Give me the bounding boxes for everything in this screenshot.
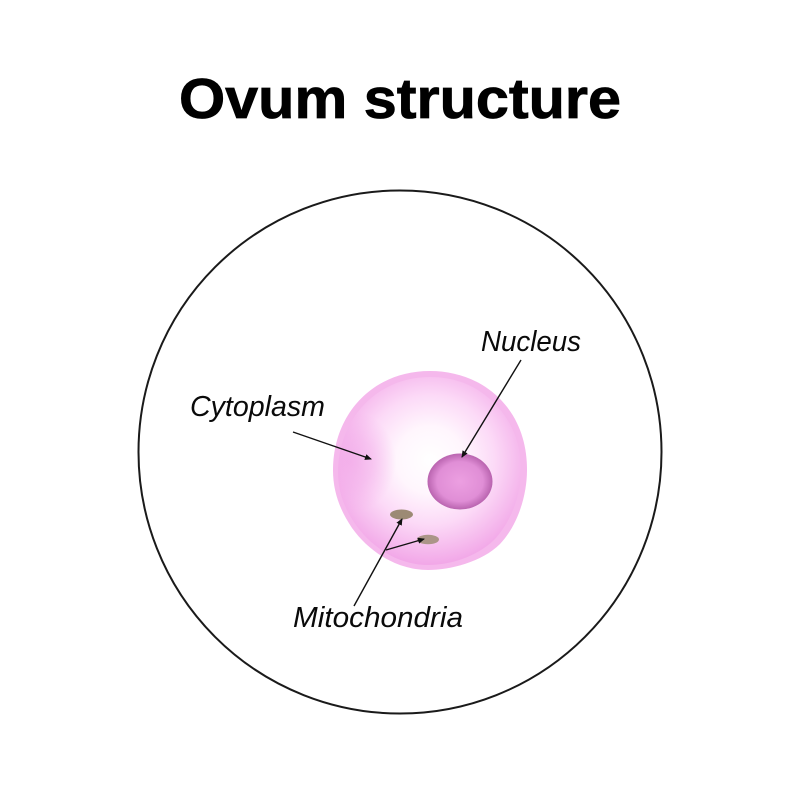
outer circle: zona boundary — [138, 190, 662, 714]
cytoplasm shading patch — [338, 426, 390, 498]
mitochondrion lower — [417, 535, 439, 544]
infographic — [138, 78, 662, 714]
label: Mitochondria: Mitochondria — [293, 602, 463, 634]
arrow: lower mitochondrion — [386, 539, 424, 550]
arrow: cytoplasm — [293, 432, 371, 459]
ovum cell — [333, 371, 527, 570]
arrow: upper mitochondrion — [354, 519, 402, 606]
mitochondrion upper — [390, 510, 413, 520]
nucleus — [428, 454, 492, 510]
arrow: nucleus — [462, 360, 521, 457]
cell membrane — [333, 371, 527, 570]
title: Ovum structure — [179, 67, 621, 131]
label: Cytoplasm: Cytoplasm — [190, 391, 325, 423]
label: Nucleus: Nucleus — [481, 326, 581, 358]
cytoplasm — [338, 377, 521, 565]
